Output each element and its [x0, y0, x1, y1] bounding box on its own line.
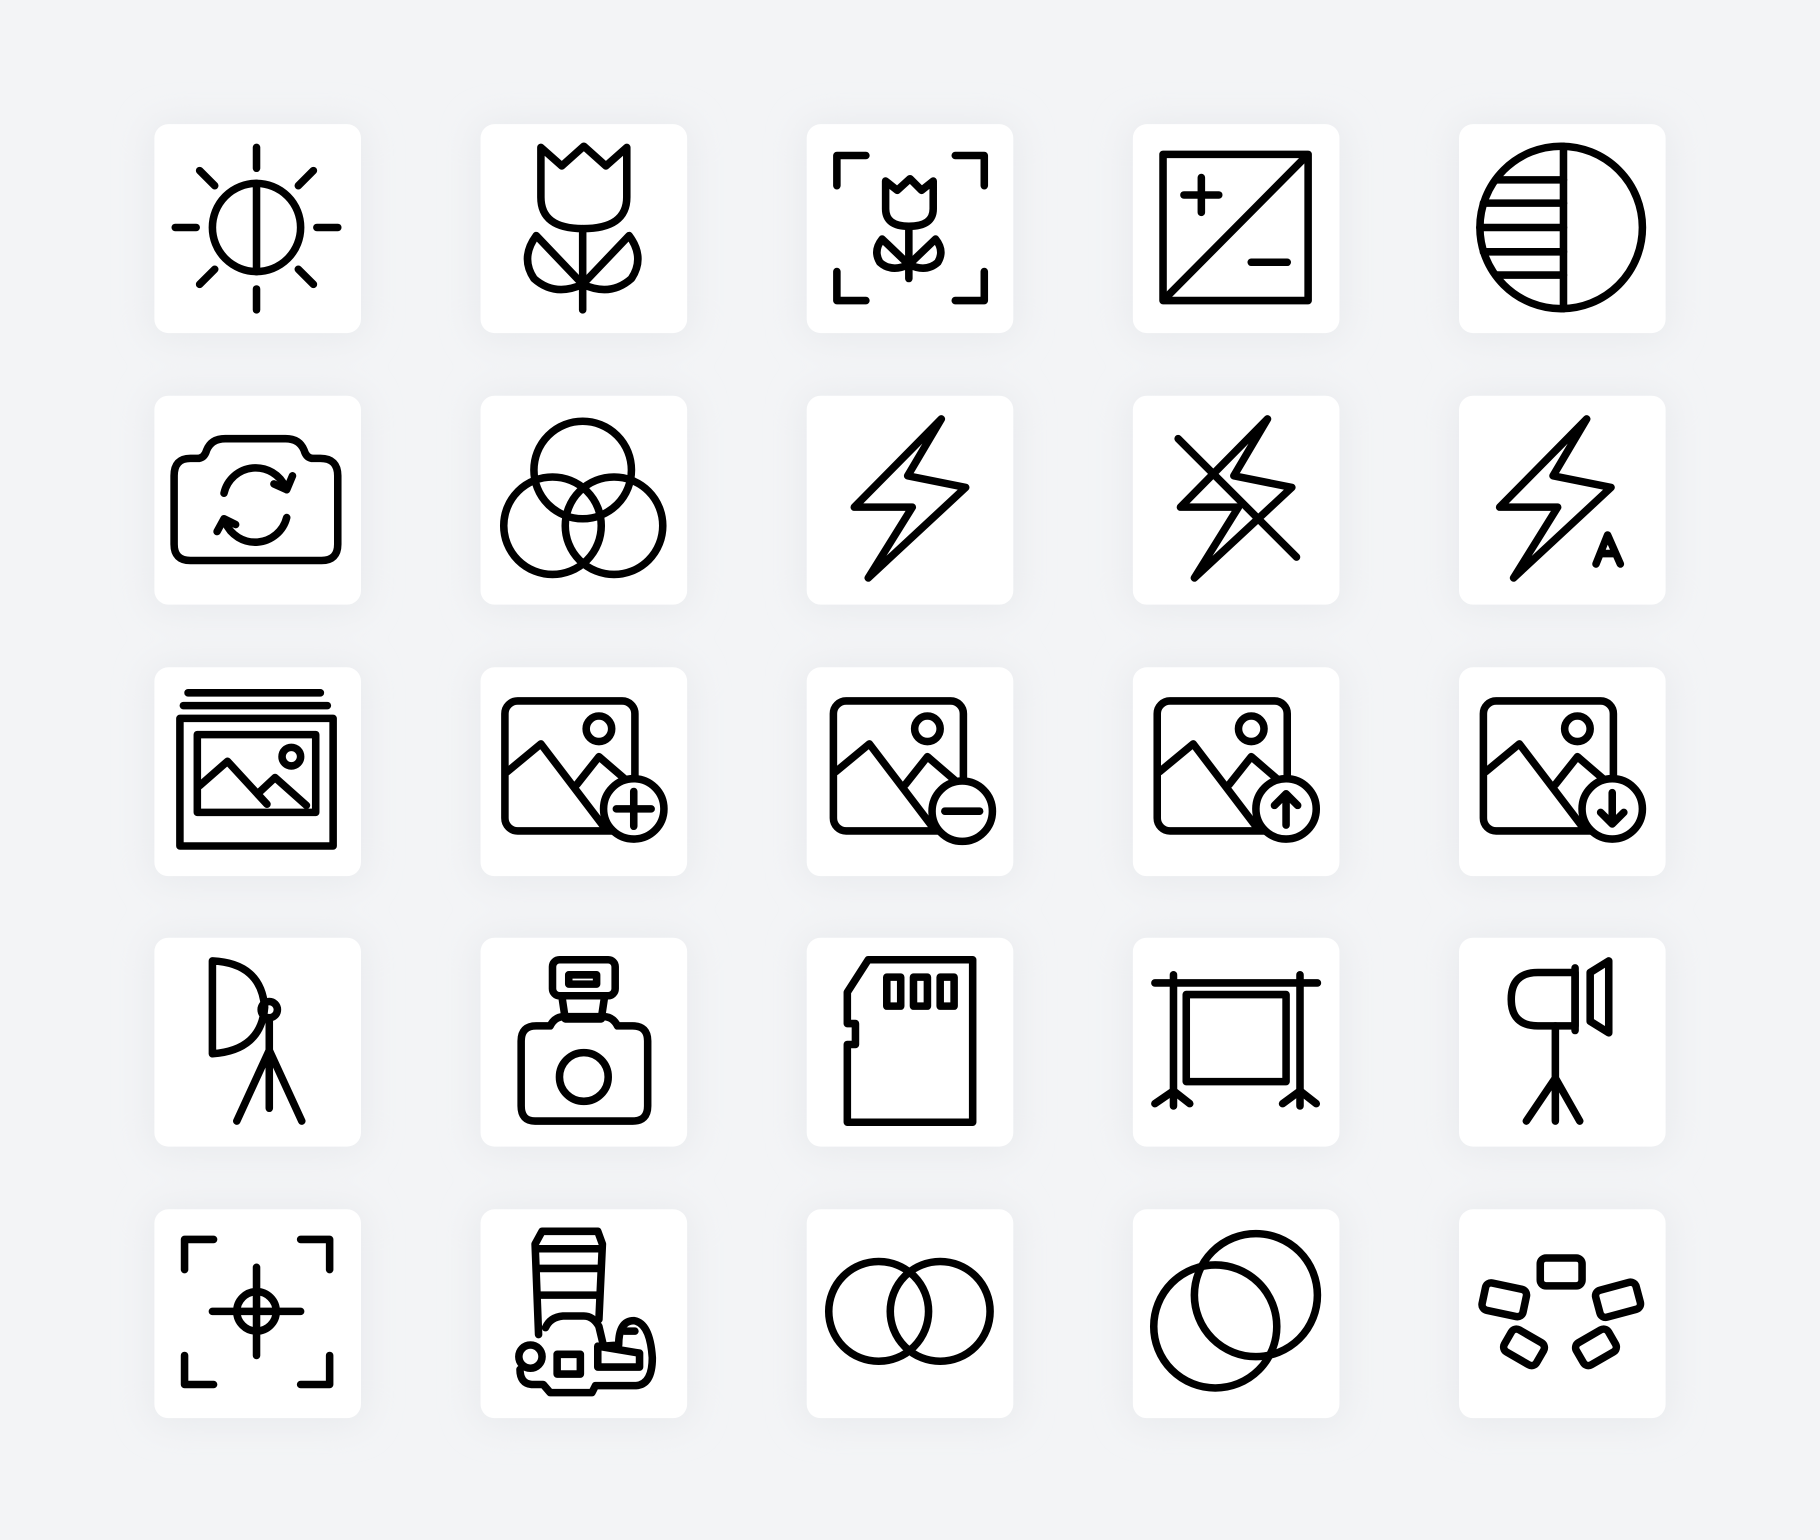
- icon: flash auto: [1500, 419, 1620, 578]
- icon: image upload: [1157, 701, 1316, 839]
- icon: spotlight: [1511, 961, 1609, 1121]
- icon: macro focus: [837, 156, 984, 301]
- icon: flash off: [1178, 419, 1297, 578]
- icon: rgb circles: [504, 421, 663, 574]
- icon: focus target: [185, 1239, 330, 1384]
- icon: exposure: [1163, 154, 1308, 301]
- icon: image add: [505, 701, 664, 839]
- icon: overlapping circles: [1154, 1234, 1317, 1388]
- icon: brightness sun: [175, 147, 338, 310]
- icon: image download: [1483, 701, 1642, 839]
- icon: backdrop: [1155, 975, 1317, 1106]
- icon: umbrella light: [212, 961, 302, 1121]
- icon: scattered shapes: [1481, 1258, 1642, 1368]
- icon: camera switch: [174, 439, 338, 561]
- icon: macro tulip: [528, 146, 638, 310]
- icon: two circles: [829, 1261, 990, 1361]
- icon: gallery: [180, 693, 333, 846]
- icon: flash: [854, 419, 966, 578]
- icon: image remove: [833, 701, 992, 841]
- icon: sd card: [847, 960, 973, 1122]
- icon: contrast circle: [1480, 146, 1642, 309]
- icon: camera with flash: [521, 960, 648, 1121]
- icon: camera lens top: [519, 1231, 652, 1393]
